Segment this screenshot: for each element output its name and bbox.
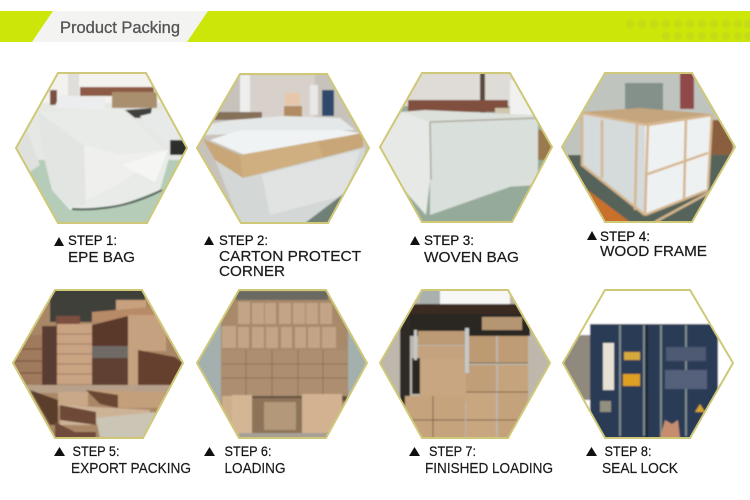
caption: step 4: STEP 4:: [600, 228, 650, 244]
panel: step 7 finished loading: [378, 288, 552, 440]
header banner: [0, 11, 750, 42]
caption: step 2: [204, 232, 361, 280]
caption: step 3: WOVEN BAG: [424, 249, 519, 266]
caption: step 3: STEP 3:: [424, 232, 474, 248]
panel: step 3 woven bag: [375, 71, 554, 224]
caption: step 2: STEP 2:: [219, 232, 268, 248]
caption: step 5: STEP 5:: [72, 443, 120, 459]
panel: step 4 wood frame: [560, 71, 737, 225]
caption: step 4: WOOD FRAME: [600, 243, 707, 260]
caption: step 3: [410, 232, 519, 266]
caption: step 1: EPE BAG: [68, 249, 135, 266]
caption: step 1: [54, 232, 135, 266]
caption: step 4: [587, 228, 707, 260]
caption: step 7: [409, 443, 553, 477]
caption: step 6: STEP 6:: [224, 443, 272, 459]
caption: step 6: LOADING: [224, 460, 286, 477]
caption: step 1: STEP 1:: [68, 232, 117, 248]
caption: step 7: FINISHED LOADING: [425, 460, 553, 477]
caption: step 6: [204, 443, 286, 477]
caption: step 7: STEP 7:: [429, 443, 476, 459]
panel: step 5 export packing: [10, 288, 186, 440]
caption: step 8: STEP 8:: [604, 443, 652, 459]
panel: step 8 seal lock: [560, 288, 736, 440]
panel: step 6 loading: [195, 288, 370, 440]
caption: step 2: CARTON PROTECT: [219, 248, 361, 265]
caption: step 2: CORNER: [219, 263, 285, 280]
caption: step 5: [54, 443, 191, 477]
panel: step 1 EPE bag: [10, 70, 190, 226]
caption: step 5: EXPORT PACKING: [71, 460, 191, 477]
caption: step 8: [586, 443, 678, 477]
panel: step 2 carton protect corner: [195, 72, 371, 226]
title: Product Packing: [60, 19, 180, 37]
caption: step 8: SEAL LOCK: [602, 460, 678, 477]
